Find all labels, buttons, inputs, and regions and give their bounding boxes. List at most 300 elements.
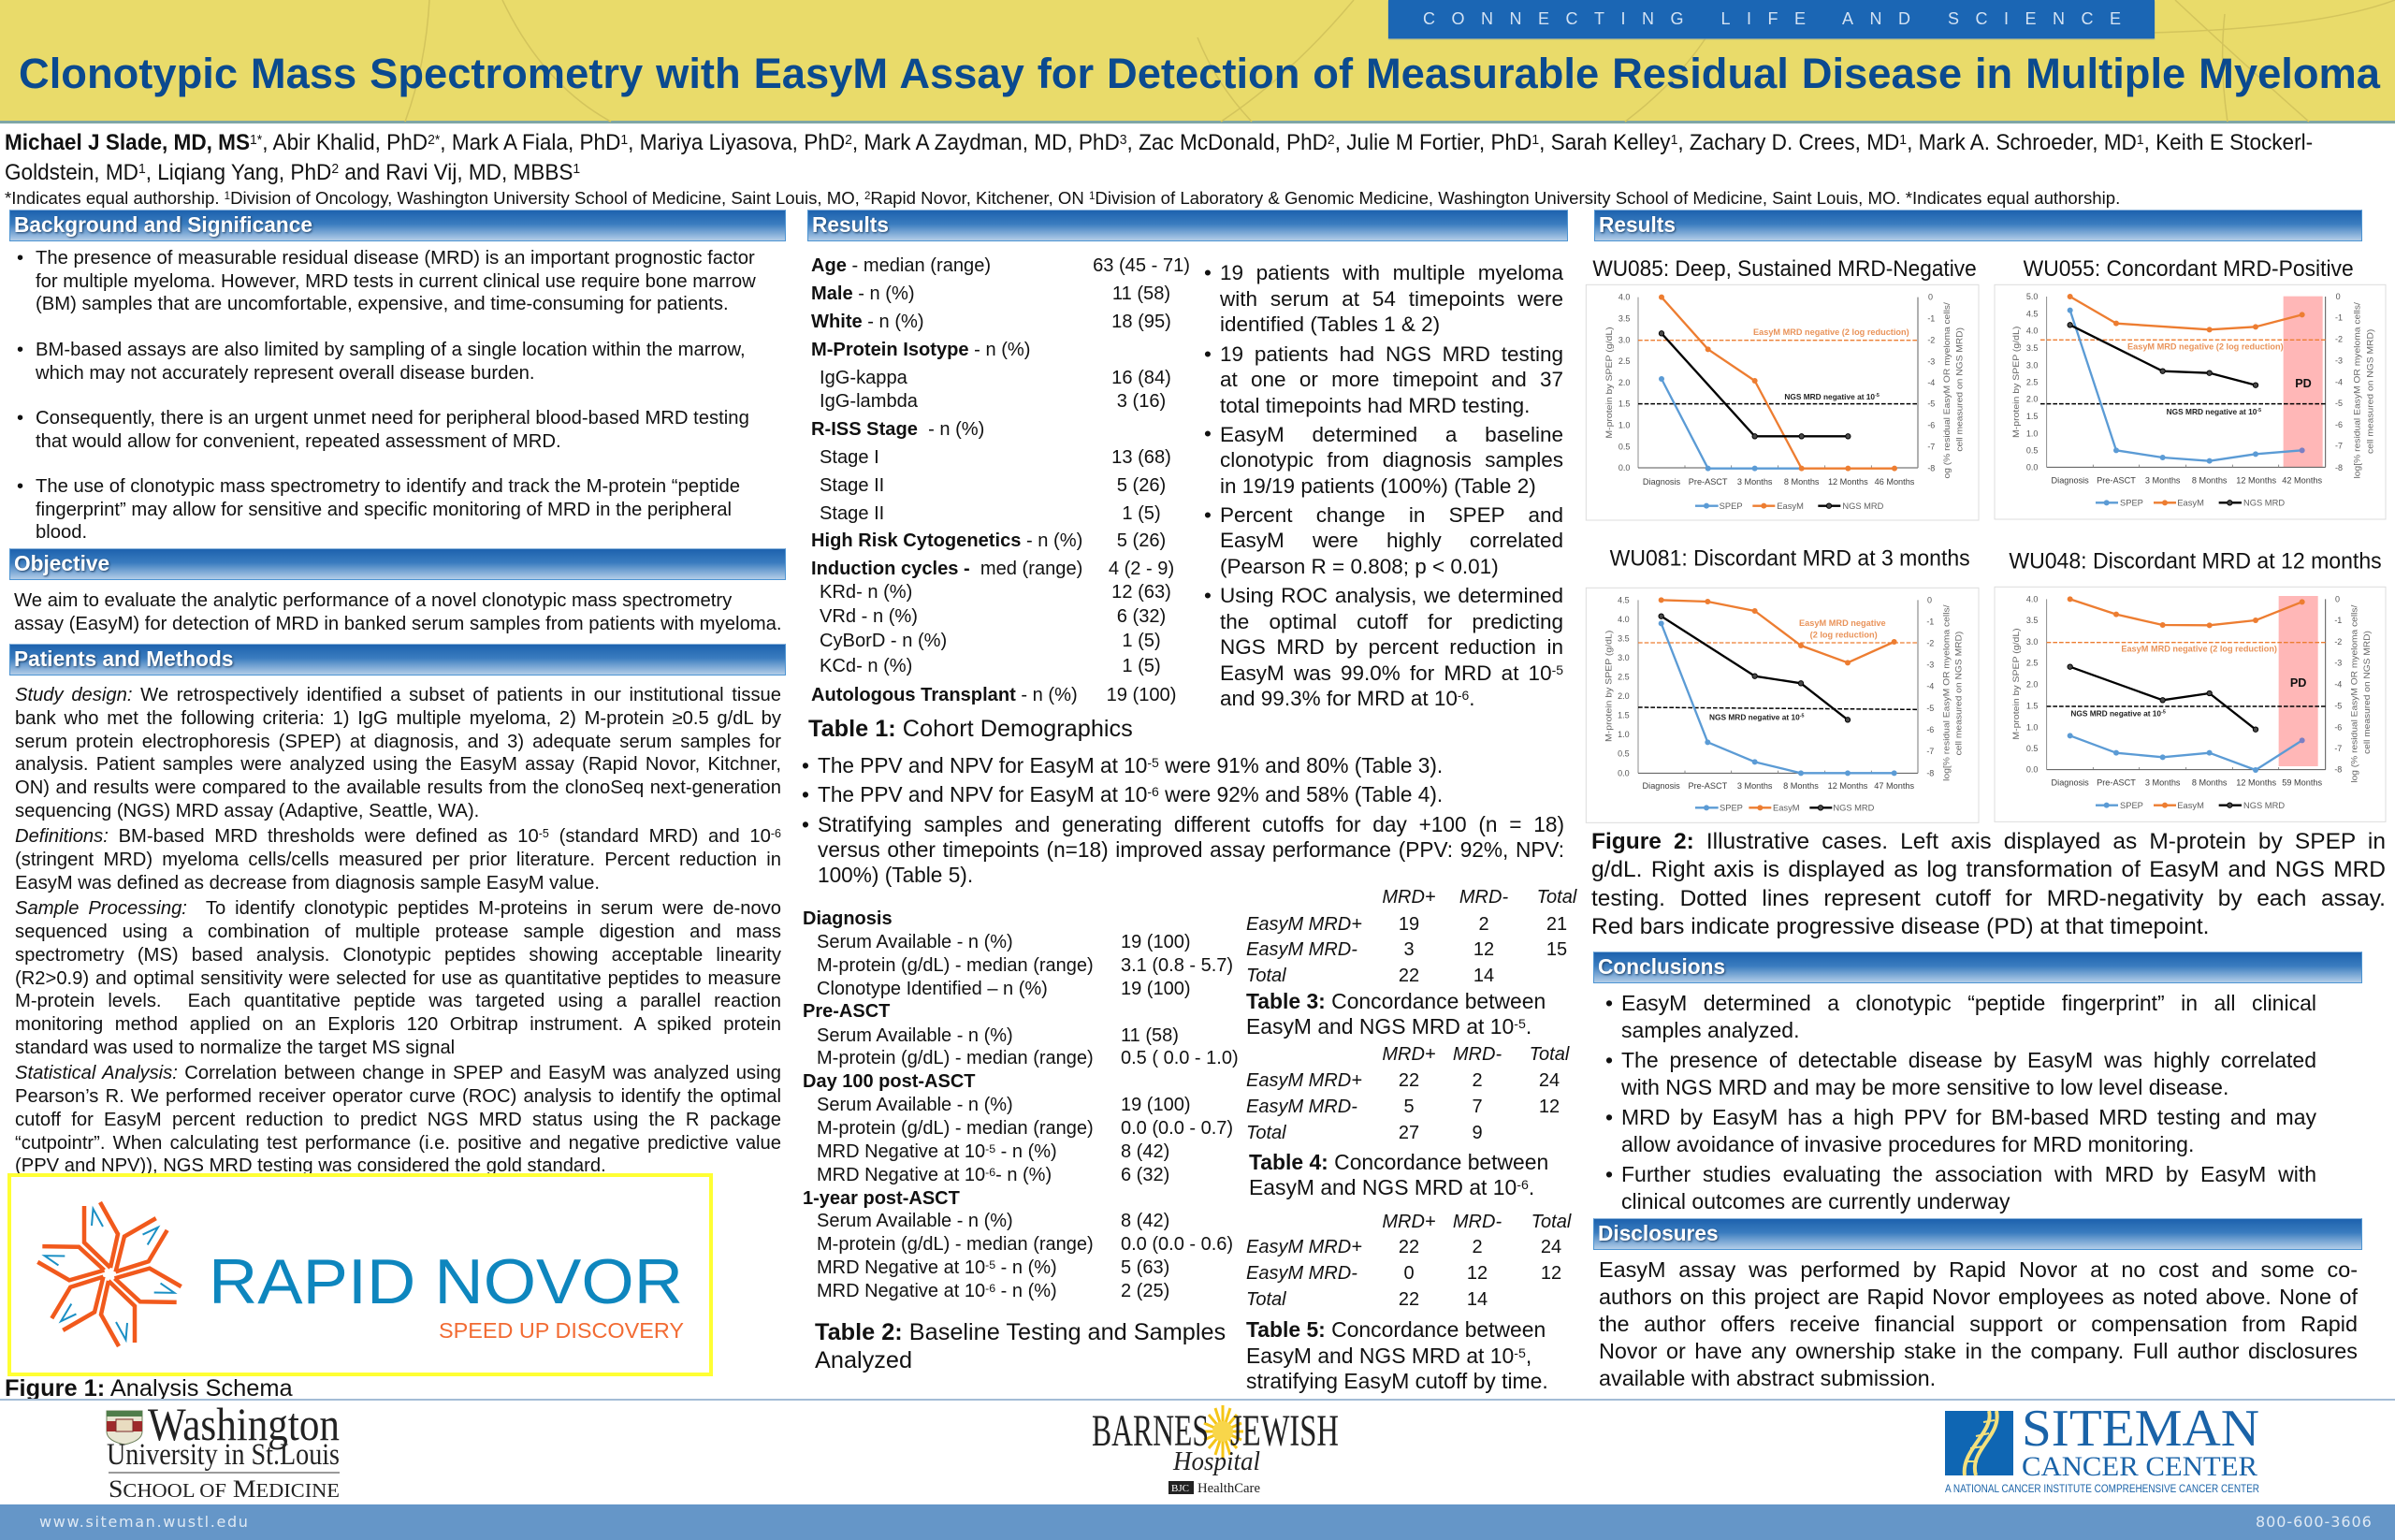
table 4: 12 — [1539, 1097, 1560, 1117]
disclosures text: the author offers receive financial support or compensation from Rapid — [1599, 1312, 2358, 1336]
table 2: baseline testing: 8 (42) — [1121, 1211, 1169, 1231]
methods text: bank who met the following criteria: 1) IgG multiple myeloma, 2) M-protein ≥0.5 g/dL by — [15, 708, 781, 729]
authors — [5, 130, 2313, 185]
table 2: baseline testing: 3.1 (0.8 - 5.7) — [1121, 955, 1233, 976]
chart: WU085: 3.5 — [1618, 313, 1630, 323]
table 2: baseline testing: 8 (42) — [1121, 1141, 1169, 1162]
table 1: cohort demographics: R-ISS Stage - n (%) — [811, 419, 984, 440]
conclusions bullets: samples analyzed. — [1621, 1018, 1800, 1042]
chart: WU055: -3 — [2335, 356, 2343, 365]
text: • — [1605, 991, 1613, 1015]
conclusions bullets: clinical outcomes are currently underway — [1621, 1189, 2010, 1213]
logo: Siteman Cancer Center: A NATIONAL CANCER INSTITUTE COMPREHENSIVE CANCER CENTER — [1945, 1484, 2259, 1495]
table 2: baseline testing: MRD Negative at 10-6 - n (%) — [817, 1281, 1057, 1301]
table 2: baseline testing: MRD Negative at 10-5 - n (%) — [817, 1141, 1057, 1162]
chart: WU085: NGS MRD — [1842, 501, 1884, 511]
conclusions bullets: The presence of detectable disease by EasyM was highly correlated — [1621, 1048, 2316, 1072]
methods text: spectrometry (MS) based analysis. Clonotypic peptides showing acceptable linearity — [15, 945, 781, 966]
table 1: cohort demographics: High Risk Cytogenetics - n (%) — [811, 530, 1082, 551]
results bullets: upper right: EasyM were highly correlated — [1220, 529, 1563, 552]
table 3: Total — [1246, 966, 1286, 986]
chart: WU048: -5 — [2334, 701, 2342, 710]
chart: WU048: M-protein by SPEP (g/dL) — [2011, 628, 2021, 740]
table 5 caption: EasyM and NGS MRD at 10-5, — [1246, 1344, 1531, 1368]
table 2 caption: Table 2: Baseline Testing and Samples — [815, 1319, 1226, 1345]
table 1: cohort demographics: 1 (5) — [1122, 631, 1161, 651]
table 1: cohort demographics — [811, 255, 1190, 705]
methods text: M-protein levels. Each quantitative peptide was targeted using a parallel reaction — [15, 991, 781, 1011]
text: • — [1204, 422, 1212, 445]
logo: Siteman Cancer Center: SITEMAN — [2022, 1400, 2259, 1458]
chart: WU048: EasyM — [2177, 801, 2204, 810]
table 3: EasyM MRD+ — [1246, 913, 1362, 934]
chart: WU081: log[% residual EasyM OR myeloma cells/ — [1941, 604, 1951, 781]
chart: WU081: NGS MRD negative at 10 — [1709, 713, 1800, 722]
chart: WU055: -4 — [2335, 377, 2343, 386]
methods text: sequencing (NGS) MRD assay (Adaptive, Seattle, WA). — [15, 801, 479, 821]
table 1: cohort demographics: KRd- n (%) — [820, 582, 912, 603]
table 4: MRD+ — [1382, 1044, 1436, 1065]
chart: WU055: PD — [2295, 377, 2312, 390]
chart: WU081: EasyM — [1773, 803, 1800, 812]
chart: WU081: 47 Months — [1874, 781, 1914, 791]
text: • — [1204, 261, 1212, 284]
chart: WU055: -5 — [2257, 408, 2261, 414]
table 4 caption: EasyM and NGS MRD at 10-6. — [1249, 1175, 1534, 1199]
methods text: analysis. Patient samples were analyzed using the EasyM assay (Rapid Novor, Kitchner, — [15, 754, 781, 775]
table 2: baseline testing: Serum Available - n (%) — [817, 932, 1013, 952]
table 3: 21 — [1546, 913, 1567, 934]
table 3: 2 — [1478, 913, 1489, 934]
text: • — [1605, 1048, 1613, 1072]
text: • — [17, 408, 23, 429]
results bullets: upper right: identified (Tables 1 & 2) — [1220, 312, 1440, 336]
table 3 caption: Table 3: Concordance between — [1246, 989, 1546, 1013]
background bullets: for multiple myeloma. However, MRD tests in current clinical use require bone marrow — [36, 271, 756, 292]
chart: WU081: -2 — [1926, 638, 1934, 647]
chart: WU048: 8 Months — [2192, 778, 2228, 788]
chart: WU081: -3 — [1926, 660, 1934, 669]
heading: results middle: Results — [812, 212, 889, 237]
chart: WU055: 0.5 — [2026, 445, 2038, 455]
table 4 — [1246, 1044, 1570, 1143]
tagline box: CONNECTING LIFE AND SCIENCE — [1423, 9, 2138, 28]
heading: conclusions: Conclusions — [1598, 954, 1725, 979]
heading: results right — [1594, 210, 2362, 241]
table 1: cohort demographics: White - n (%) — [811, 312, 924, 332]
table 3: 3 — [1403, 939, 1415, 960]
table 3: Total — [1537, 887, 1576, 908]
table 2 caption — [815, 1319, 1226, 1373]
chart: WU085: -4 — [1927, 378, 1935, 387]
table 1: cohort demographics: M-Protein Isotype - n (%) — [811, 340, 1030, 360]
chart: WU081: cell measured on NGS MRD) — [1954, 632, 1964, 755]
chart: WU081: 1.5 — [1618, 711, 1630, 720]
table 5: 14 — [1467, 1289, 1488, 1310]
table 2: baseline testing: Day 100 post-ASCT — [803, 1071, 975, 1092]
chart: WU048: 0.0 — [2026, 765, 2038, 775]
heading: disclosures: Disclosures — [1598, 1221, 1719, 1245]
chart: WU055: EasyM — [2177, 499, 2204, 508]
logo: Washington University: Washington — [148, 1398, 340, 1450]
table 1: cohort demographics: Stage II — [820, 503, 884, 524]
results bullets: upper right: EasyM was 99.0% for MRD at 10-5 — [1220, 661, 1563, 685]
table 1: cohort demographics: 11 (58) — [1112, 283, 1170, 304]
table 3 caption: EasyM and NGS MRD at 10-5. — [1246, 1014, 1531, 1039]
disclosures text: available with abstract submission. — [1599, 1366, 1936, 1390]
conclusions bullets: with NGS MRD and may be more sensitive to low level disease. — [1621, 1075, 2228, 1099]
results bullets: PPV and NPV — [802, 753, 1564, 887]
disclosures text: authors on this project are Rapid Novor employees as noted above. None of — [1599, 1285, 2358, 1309]
chart: WU055: -8 — [2335, 463, 2343, 472]
table 1: cohort demographics: 4 (2 - 9) — [1109, 559, 1174, 579]
chart: WU055: -5 — [2335, 399, 2343, 408]
table 1: cohort demographics: 16 (84) — [1111, 368, 1171, 388]
table 3: 12 — [1473, 939, 1494, 960]
chart: WU081: 0.0 — [1618, 768, 1630, 777]
chart: WU055: Diagnosis — [2052, 475, 2089, 485]
methods text: Definitions: BM-based MRD thresholds were defined as 10-5 (standard MRD) and 10-6 — [15, 826, 781, 847]
table 2: baseline testing: Clonotype Identified – n (%) — [817, 979, 1048, 999]
chart: WU055: SPEP — [2120, 499, 2143, 508]
chart: WU085: NGS MRD negative at 10 — [1784, 392, 1875, 401]
table 2: baseline testing: M-protein (g/dL) - median (range) — [817, 1118, 1094, 1139]
disclosures text: Novor or have any ownership stake in the company. Full author disclosures — [1599, 1339, 2358, 1363]
table 1: cohort demographics: Male - n (%) — [811, 283, 915, 304]
table 1: cohort demographics: 12 (63) — [1111, 582, 1171, 603]
logo: Washington University: University in St.Louis — [107, 1438, 340, 1472]
chart: WU048: NGS MRD negative at 10 — [2070, 708, 2161, 718]
results bullets: upper right: EasyM determined a baseline — [1220, 423, 1563, 446]
table 2: baseline testing: M-protein (g/dL) - median (range) — [817, 1234, 1094, 1255]
header banner — [0, 0, 2395, 123]
icon: rapid novor star — [35, 1202, 184, 1346]
table 5: MRD+ — [1382, 1212, 1436, 1232]
chart: WU048: log (% residual EasyM OR myeloma cells/ — [2350, 604, 2359, 783]
conclusions bullets: MRD by EasyM has a high PPV for BM-based MRD testing and may — [1621, 1105, 2316, 1129]
chart: WU055: 2.0 — [2026, 395, 2038, 404]
chart: WU081: 4.0 — [1618, 615, 1630, 624]
authors: Goldstein, MD1, Liqiang Yang, PhD2 and Ravi Vij, MD, MBBS1 — [5, 159, 580, 185]
chart: WU081: 0 — [1927, 595, 1932, 604]
footer band: www.siteman.wustl.edu — [39, 1513, 250, 1531]
table 2: baseline testing: 0.0 (0.0 - 0.6) — [1121, 1234, 1233, 1255]
results bullets: upper right: and 99.3% for MRD at 10-6. — [1220, 687, 1475, 710]
text: • — [1204, 584, 1212, 607]
chart: WU055: -7 — [2335, 442, 2343, 451]
table 2 caption: Analyzed — [815, 1347, 912, 1373]
chart: WU048: NGS MRD — [2243, 801, 2285, 810]
methods text: Study design: We retrospectively identified a subset of patients in our institutional tissue — [15, 685, 781, 705]
heading: results middle — [807, 210, 1568, 241]
objective text — [14, 590, 782, 634]
background bullets — [17, 248, 756, 543]
table 5: 22 — [1399, 1289, 1419, 1310]
chart: WU081: 4.5 — [1618, 595, 1630, 604]
chart: WU085: 0.0 — [1618, 463, 1630, 472]
chart: WU055: 4.5 — [2026, 309, 2038, 318]
table 2: baseline testing: Diagnosis — [803, 908, 893, 929]
methods text: (PPV and NPV)), NGS MRD testing was considered the gold standard. — [15, 1155, 606, 1176]
chart: WU048: 0 — [2335, 594, 2340, 603]
chart: WU055: 0.0 — [2026, 462, 2038, 472]
table 2: baseline testing — [803, 908, 1239, 1301]
chart: WU048: EasyM MRD negative (2 log reduction) — [2121, 645, 2277, 654]
table 2: baseline testing: Serum Available - n (%) — [817, 1025, 1013, 1046]
chart: WU055: 8 Months — [2192, 475, 2228, 485]
logo: Barnes-Jewish Hospital: BARNES — [1092, 1406, 1209, 1456]
chart: WU048: 12 Months — [2236, 778, 2276, 788]
table 2: baseline testing: 0.0 (0.0 - 0.7) — [1121, 1118, 1233, 1139]
results bullets: upper right: Using ROC analysis, we determined — [1220, 584, 1563, 607]
logo: Barnes-Jewish Hospital: Hospital — [1172, 1447, 1260, 1476]
chart: WU055: -2 — [2335, 335, 2343, 344]
chart: WU048: cell measured on NGS MRD) — [2362, 631, 2372, 754]
footer band: 800-600-3606 — [2256, 1513, 2373, 1531]
chart: WU085 — [1585, 256, 1980, 520]
text: • — [17, 340, 23, 360]
chart: WU085: -2 — [1927, 335, 1935, 344]
footer band — [0, 1504, 2395, 1540]
background bullets: Consequently, there is an urgent unmet need for peripheral blood-based MRD testing — [36, 408, 749, 429]
figure 1 logo panel — [7, 1173, 713, 1376]
results bullets: upper right: NGS MRD by percent reduction in — [1220, 635, 1563, 659]
chart: WU048: -7 — [2334, 744, 2342, 753]
logo: Siteman Cancer Center — [1945, 1400, 2259, 1495]
logo wordmark: RAPID NOVOR — [209, 1246, 683, 1317]
table 4: EasyM MRD- — [1246, 1097, 1357, 1117]
chart: WU055 — [1995, 256, 2386, 520]
chart: WU055: M-protein by SPEP (g/dL) — [2011, 327, 2021, 438]
chart: WU048: 4.0 — [2026, 594, 2038, 603]
chart: WU081: 2.0 — [1618, 691, 1630, 701]
disclosures text: EasyM assay was performed by Rapid Novor at no cost and some co- — [1599, 1257, 2358, 1282]
chart: WU085: 0 — [1928, 293, 1933, 302]
logo: Siteman Cancer Center: CANCER CENTER — [2022, 1451, 2257, 1482]
table 1: cohort demographics: IgG-kappa — [820, 368, 907, 388]
chart: WU055: NGS MRD negative at 10 — [2167, 407, 2257, 416]
background bullets: The presence of measurable residual disease (MRD) is an important prognostic factor — [36, 248, 755, 269]
logo: Barnes-Jewish Hospital: HealthCare — [1198, 1481, 1260, 1496]
disclosures text — [1599, 1257, 2358, 1390]
table 4: 22 — [1399, 1070, 1419, 1091]
table 3 caption — [1246, 989, 1546, 1039]
results bullets: upper right: in 19/19 patients (100%) (Table 2) — [1220, 474, 1536, 498]
results bullets: upper right: 19 patients with multiple myeloma — [1220, 261, 1563, 284]
tagline box — [1388, 0, 2155, 38]
results bullets: PPV and NPV: versus other timepoints (n=18) improved assay performance (PPV: 92%, NPV: — [818, 836, 1564, 861]
text: • — [802, 812, 809, 836]
figure 2 caption — [1591, 829, 2386, 939]
objective text: assay (EasyM) for detection of MRD in banked serum samples from patients with myeloma. — [14, 614, 782, 634]
table 5: 12 — [1467, 1263, 1488, 1284]
chart: WU085: 2.5 — [1618, 356, 1630, 366]
table 4: EasyM MRD+ — [1246, 1070, 1362, 1091]
chart: WU081: SPEP — [1720, 803, 1743, 812]
table 1: cohort demographics: Induction cycles - med (range) — [811, 559, 1082, 579]
chart: WU085: SPEP — [1720, 501, 1743, 511]
table 2: baseline testing: Serum Available - n (%) — [817, 1095, 1013, 1115]
table 5: MRD- — [1453, 1212, 1502, 1232]
results bullets: upper right: (Pearson R = 0.808; p < 0.01) — [1220, 555, 1499, 578]
results bullets: upper right: at one or more timepoint and 37 — [1220, 368, 1563, 391]
table 4: 24 — [1539, 1070, 1560, 1091]
table 1: cohort demographics: 13 (68) — [1111, 447, 1171, 468]
table 4: 7 — [1472, 1097, 1483, 1117]
table 3: 22 — [1399, 966, 1419, 986]
background bullets: (BM) samples that are uncomfortable, expensive, and time-consuming for patients. — [36, 294, 729, 314]
results bullets: upper right — [1204, 261, 1563, 710]
table 5 — [1246, 1212, 1572, 1310]
conclusions bullets — [1605, 991, 2316, 1213]
chart: WU048: WU048: Discordant MRD at 12 months — [2009, 548, 2382, 574]
table 5: 12 — [1541, 1263, 1561, 1284]
methods text: “cutpointr”. When calculating test performance (i.e. positive and negative predictive value — [15, 1133, 781, 1154]
heading: background: Background and Significance — [14, 212, 312, 237]
chart: WU085: 8 Months — [1784, 477, 1820, 487]
chart: WU055: WU055: Concordant MRD-Positive — [2024, 256, 2354, 282]
table 1: cohort demographics: KCd- n (%) — [820, 656, 912, 676]
chart: WU055: 3.0 — [2026, 360, 2038, 370]
logo: Barnes-Jewish Hospital: JEWISH — [1230, 1406, 1339, 1456]
table 5: Total — [1246, 1289, 1286, 1310]
chart: WU055: NGS MRD — [2243, 499, 2285, 508]
table 1: cohort demographics: 1 (5) — [1122, 656, 1161, 676]
table 1 caption: Table 1: Cohort Demographics — [808, 716, 1133, 742]
results bullets: PPV and NPV: Stratifying samples and generating different cutoffs for day +100 (n = 18) — [818, 812, 1564, 836]
chart: WU081: -6 — [1926, 725, 1934, 734]
chart: WU055: 3 Months — [2145, 475, 2181, 485]
chart: WU055: Pre-ASCT — [2097, 475, 2136, 485]
chart: WU085: Diagnosis — [1643, 477, 1681, 487]
table 4: 27 — [1399, 1123, 1419, 1143]
table 4: Total — [1246, 1123, 1286, 1143]
table 5: 2 — [1472, 1237, 1483, 1257]
chart: WU055: -6 — [2335, 420, 2343, 429]
heading: disclosures — [1593, 1218, 2362, 1250]
table 4: 2 — [1472, 1070, 1483, 1091]
chart: WU055: 42 Months — [2282, 475, 2322, 485]
chart: WU085: -6 — [1927, 421, 1935, 430]
results bullets: upper right: clonotypic from diagnosis samples — [1220, 448, 1563, 472]
objective text: We aim to evaluate the analytic performance of a novel clonotypic mass spectrometry — [14, 590, 732, 611]
table 5 caption — [1246, 1317, 1548, 1393]
table 2: baseline testing: 0.5 ( 0.0 - 1.0) — [1121, 1048, 1239, 1068]
table 2: baseline testing: 19 (100) — [1121, 1095, 1190, 1115]
chart: WU085: 4.0 — [1618, 293, 1630, 302]
table 3: EasyM MRD- — [1246, 939, 1357, 960]
chart: WU048: SPEP — [2120, 801, 2143, 810]
affiliations: *Indicates equal authorship. 1Division of Oncology, Washington University School of Medicine, Saint Louis, MO, 2Rapid Novor, Kitchener, ON 1Division of Laboratory & Genomic Medicine, Washington University School of Medicine, Saint Louis, MO. *Indicates equal authorship. — [5, 188, 2120, 208]
chart: WU048: -4 — [2334, 680, 2342, 690]
table 2: baseline testing: 11 (58) — [1121, 1025, 1179, 1046]
text: • — [17, 476, 23, 497]
chart: WU081: -5 — [1800, 714, 1805, 719]
chart: WU085: 1.0 — [1618, 421, 1630, 430]
figure 2 caption: testing. Dotted lines represent cutoff for MRD-negativity by each assay. — [1591, 886, 2386, 911]
table 4: 9 — [1472, 1123, 1483, 1143]
chart: WU085: cell measured on NGS MRD) — [1954, 327, 1964, 452]
chart: WU081: WU081: Discordant MRD at 3 months — [1610, 545, 1970, 571]
chart: WU085: 1.5 — [1618, 400, 1630, 409]
table 4: MRD- — [1453, 1044, 1502, 1065]
table 5 caption: stratifying EasyM cutoff by time. — [1246, 1369, 1548, 1393]
table 2: baseline testing: 19 (100) — [1121, 979, 1190, 999]
chart: WU055: 2.5 — [2026, 378, 2038, 387]
background bullets: BM-based assays are also limited by sampling of a single location within the marrow, — [36, 340, 746, 360]
table 3: 19 — [1399, 913, 1419, 934]
table 4 caption — [1249, 1150, 1548, 1199]
table 1: cohort demographics: Age - median (range) — [811, 255, 991, 276]
table 2: baseline testing: MRD Negative at 10-5 - n (%) — [817, 1257, 1057, 1278]
chart: WU081: 8 Months — [1783, 781, 1819, 791]
chart: WU055: 3.5 — [2026, 343, 2038, 353]
results bullets: PPV and NPV: 100%) (Table 5). — [818, 863, 973, 887]
chart: WU048: 0.5 — [2026, 744, 2038, 753]
table 3: MRD+ — [1382, 887, 1436, 908]
methods text: (stringent MRD) myeloma cells/cells measured per prior literature. Percent reduction in — [15, 850, 781, 870]
heading: patients and methods — [9, 644, 786, 676]
chart: WU055: log[% residual EasyM OR myeloma cells/ — [2352, 302, 2361, 479]
methods text: ON) and results were compared to the available results from the clonoSeq next-generation — [15, 777, 781, 798]
chart: WU081 — [1585, 545, 1980, 823]
methods text: EasyM was defined as decrease from diagnosis sample EasyM value. — [15, 873, 600, 893]
chart: WU048: 3.5 — [2026, 616, 2038, 625]
chart: WU081: EasyM MRD negative — [1799, 618, 1886, 628]
heading: results right: Results — [1599, 212, 1676, 237]
table 1: cohort demographics: 19 (100) — [1107, 685, 1176, 705]
methods text: (R2>0.9) and optimal sensitivity were selected for use as quantitative peptides to measure — [15, 968, 781, 989]
chart: WU055: 1.0 — [2026, 429, 2038, 438]
table 1: cohort demographics: 5 (26) — [1117, 475, 1166, 496]
table 2: baseline testing: MRD Negative at 10-6- n (%) — [817, 1165, 1052, 1185]
text: • — [802, 782, 809, 806]
table 1: cohort demographics: 18 (95) — [1111, 312, 1171, 332]
table 1: cohort demographics: Autologous Transplant - n (%) — [811, 685, 1078, 705]
background bullets: blood. — [36, 522, 87, 543]
heading: conclusions — [1593, 952, 2362, 983]
background bullets: which may not accurately represent overall disease burden. — [36, 363, 535, 384]
chart: WU081: (2 log reduction) — [1810, 631, 1878, 640]
table 3 — [1246, 887, 1577, 986]
results bullets: upper right: Percent change in SPEP and — [1220, 503, 1563, 527]
chart: WU085: og (% residual EasyM OR myeloma cells/ — [1942, 302, 1952, 479]
table 2: baseline testing: 19 (100) — [1121, 932, 1190, 952]
chart: WU048: 3 Months — [2145, 778, 2181, 788]
footer divider — [0, 1399, 2395, 1401]
chart: WU048: 2.5 — [2026, 659, 2038, 668]
chart: WU081: 2.5 — [1618, 673, 1630, 682]
chart: WU085: EasyM — [1777, 501, 1804, 511]
results bullets: PPV and NPV: The PPV and NPV for EasyM at 10-6 were 92% and 58% (Table 4). — [818, 782, 1443, 806]
figure 2 caption: Figure 2: Illustrative cases. Left axis displayed as M-protein by SPEP in — [1591, 829, 2386, 854]
figure 2 caption: g/dL. Right axis is displayed as log transformation of EasyM and NGS MRD — [1591, 857, 2386, 882]
table 5: EasyM MRD+ — [1246, 1237, 1362, 1257]
chart: WU081: 12 Months — [1828, 781, 1868, 791]
table 2: baseline testing: 1-year post-ASCT — [803, 1188, 960, 1209]
chart: WU085: 12 Months — [1828, 477, 1868, 487]
chart: WU085: Pre-ASCT — [1689, 477, 1728, 487]
chart: WU048: 1.0 — [2026, 722, 2038, 732]
methods text: serum protein electrophoresis (SPEP) at diagnosis, and 3) adequate serum samples for — [15, 732, 781, 752]
table 4: Total — [1530, 1044, 1569, 1065]
chart: WU081: Pre-ASCT — [1688, 781, 1728, 791]
table 1: cohort demographics: 1 (5) — [1122, 503, 1161, 524]
figure 2 caption: Red bars indicate progressive disease (PD) at that timepoint. — [1591, 914, 2209, 939]
chart: WU055: -1 — [2335, 313, 2343, 323]
chart: WU048: -1 — [2334, 616, 2342, 625]
chart: WU048: -2 — [2334, 637, 2342, 647]
